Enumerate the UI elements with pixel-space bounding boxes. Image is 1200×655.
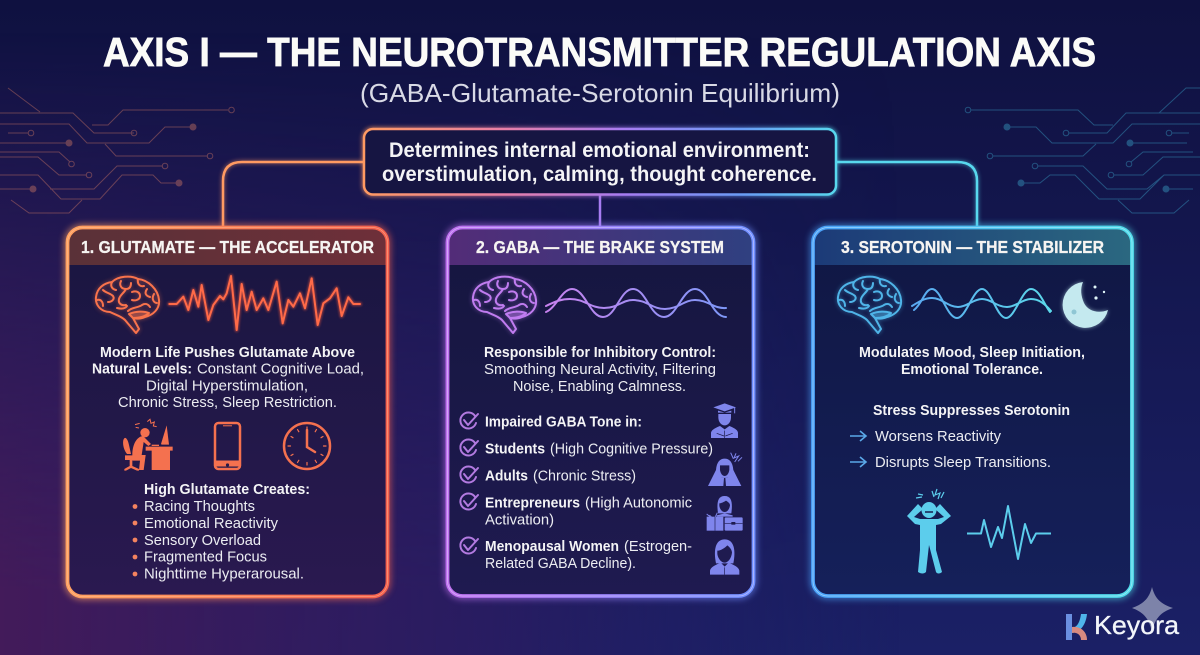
- central summary box: Determines internal emotional environment:: [389, 139, 810, 162]
- panel 2: gaba: [448, 228, 754, 596]
- list: high glutamate effects: Nighttime Hyperarousal.: [144, 566, 304, 582]
- text: inhibitory control: [484, 345, 716, 395]
- icon: stressed adult: [708, 453, 742, 486]
- icon: stressed figure: [907, 489, 951, 574]
- list: impaired gaba tone: [460, 413, 713, 572]
- chart: glutamate erratic wave: [169, 276, 360, 330]
- list: impaired gaba tone: (Estrogen-: [624, 539, 692, 555]
- chart: irregular pulse: [967, 506, 1051, 559]
- text: modern life: Chronic Stress, Sleep Restriction.: [118, 395, 337, 411]
- list: high glutamate effects: Sensory Overload: [144, 533, 261, 549]
- central summary box: [364, 129, 836, 194]
- panel 3 heading: 3. SEROTONIN — THE STABILIZER: [841, 237, 1104, 257]
- icon: brain purple: [473, 277, 536, 333]
- icon: entrepreneur: [707, 496, 743, 531]
- list: high glutamate effects: Racing Thoughts: [144, 499, 255, 515]
- panel 3: serotonin: [813, 228, 1132, 596]
- chart: serotonin waves: [912, 289, 1051, 318]
- icon: stressed person at desk: [123, 419, 173, 471]
- text: inhibitory control: Responsible for Inhibitory Control:: [484, 345, 716, 361]
- connector lines: [223, 162, 977, 226]
- icon: brain orange: [96, 277, 159, 333]
- title: AXIS I — THE NEUROTRANSMITTER REGULATION AXIS: [103, 29, 1096, 75]
- icon: clock: [284, 423, 330, 469]
- list: impaired gaba tone: Activation): [485, 512, 554, 528]
- list: high glutamate effects: [133, 482, 310, 582]
- text: inhibitory control: Noise, Enabling Calmness.: [513, 379, 686, 395]
- list: high glutamate effects: High Glutamate Creates:: [144, 482, 310, 498]
- logo: keyora: Keyora: [1094, 610, 1180, 640]
- list: serotonin effects: Disrupts Sleep Transitions.: [875, 455, 1051, 471]
- central summary box: overstimulation, calming, thought coherence.: [382, 163, 817, 186]
- icon: moon and stars: [1063, 282, 1108, 328]
- icon: smartphone: [215, 423, 240, 469]
- list: impaired gaba tone: (High Cognitive Pressure): [550, 442, 713, 458]
- circuit pattern: right: [965, 88, 1200, 213]
- list: serotonin effects: Worsens Reactivity: [875, 429, 1002, 445]
- text: modern life: [92, 345, 364, 411]
- text: modern life: Constant Cognitive Load,: [197, 362, 364, 378]
- list: high glutamate effects: Fragmented Focus: [144, 550, 267, 566]
- circuit pattern: left: [0, 88, 234, 213]
- panel 1 heading: 1. GLUTAMATE — THE ACCELERATOR: [81, 237, 374, 257]
- list: high glutamate effects: Emotional Reactivity: [144, 516, 279, 532]
- text: modulates mood: [859, 345, 1085, 378]
- icon: graduate: [711, 403, 738, 438]
- list: impaired gaba tone: Related GABA Decline).: [485, 556, 636, 572]
- text: modulates mood: Emotional Tolerance.: [901, 362, 1043, 378]
- panel 2 heading: 2. GABA — THE BRAKE SYSTEM: [476, 237, 724, 257]
- icon: brain blue: [838, 277, 901, 333]
- icon: menopausal woman: [710, 539, 739, 575]
- text: inhibitory control: Smoothing Neural Activity, Filtering: [484, 362, 716, 378]
- list: impaired gaba tone: Entrepreneurs: [485, 496, 580, 512]
- panel 1: glutamate: [68, 228, 388, 596]
- chart: calm gaba waves: [546, 289, 726, 317]
- subtitle: (GABA-Glutamate-Serotonin Equilibrium): [360, 78, 840, 108]
- list: impaired gaba tone: Impaired GABA Tone in:: [485, 414, 642, 430]
- icon: sparkle star: [1132, 587, 1173, 632]
- list: serotonin effects: [850, 429, 1051, 471]
- text: modulates mood: Modulates Mood, Sleep Initiation,: [859, 345, 1085, 361]
- list: impaired gaba tone: Menopausal Women: [485, 539, 619, 555]
- list: impaired gaba tone: (Chronic Stress): [533, 468, 636, 484]
- text: stress suppresses serotonin: Stress Suppresses Serotonin: [873, 403, 1070, 419]
- text: modern life: Natural Levels:: [92, 362, 192, 378]
- text: modern life: Modern Life Pushes Glutamate Above: [100, 345, 355, 361]
- list: impaired gaba tone: Students: [485, 442, 545, 458]
- text: modern life: Digital Hyperstimulation,: [146, 378, 308, 394]
- list: impaired gaba tone: Adults: [485, 468, 528, 484]
- list: impaired gaba tone: (High Autonomic: [585, 496, 692, 512]
